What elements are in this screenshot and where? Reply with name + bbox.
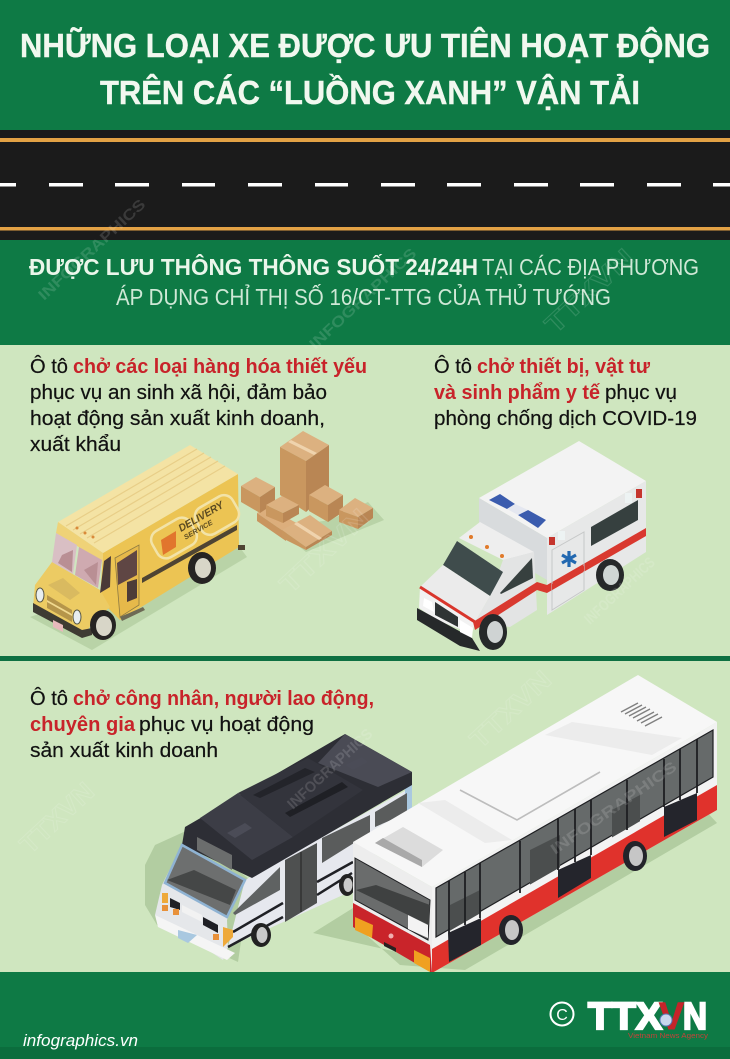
text: medical supplies: Ô tô <box>434 355 472 378</box>
icon: delivery van: DELIVERY <box>176 499 227 535</box>
text: essential goods: chở các loại hàng hóa thiết yếu <box>73 355 367 378</box>
text: essential goods <box>30 355 367 456</box>
icon: black and white bus <box>145 734 412 962</box>
subheading: ĐƯỢC LƯU THÔNG THÔNG SUỐT 24/24H <box>29 253 478 280</box>
text: medical supplies <box>434 355 697 430</box>
text: medical supplies: chở thiết bị, vật tư <box>477 355 650 378</box>
watermarks: TTXVN <box>274 502 375 599</box>
title: TRÊN CÁC “LUỒNG XANH” VẬN TẢI <box>100 74 640 111</box>
text: workers transport: Ô tô <box>30 687 68 710</box>
road <box>0 130 730 240</box>
text: medical supplies: phòng chống dịch COVID-19 <box>434 407 697 430</box>
panel: top vehicles background <box>0 345 730 656</box>
source url: infographics.vn <box>23 1031 138 1050</box>
subheading: ÁP DỤNG CHỈ THỊ SỐ 16/CT-TTG CỦA THỦ TƯỚNG <box>116 282 611 310</box>
icon: cardboard boxes <box>241 431 384 552</box>
logo: TTXVN: V <box>659 996 685 1038</box>
text: workers transport: sản xuất kinh doanh <box>30 739 218 762</box>
subheading <box>29 253 699 310</box>
watermarks: INFOGRAPHICS <box>35 196 149 304</box>
watermarks: TTXVN <box>464 664 557 754</box>
icon: delivery van: SERVICE <box>183 519 215 542</box>
watermarks <box>14 196 680 859</box>
text: workers transport <box>30 687 374 762</box>
watermarks: INFOGRAPHICS <box>284 725 376 813</box>
title <box>20 26 710 111</box>
text: workers transport: phục vụ hoạt động <box>139 713 314 736</box>
text: essential goods: phục vụ an sinh xã hội, đảm bảo <box>30 381 327 404</box>
watermarks: INFOGRAPHICS <box>548 758 680 858</box>
copyright mark <box>550 1002 574 1026</box>
logo: TTXVN: TTX <box>588 996 663 1038</box>
icon: red and white bus <box>313 675 717 973</box>
icon: delivery van <box>30 445 247 650</box>
panel: subheading band <box>0 240 730 345</box>
watermarks: INFOGRAPHICS <box>581 554 659 628</box>
text: essential goods: Ô tô <box>30 355 68 378</box>
icon: ambulance <box>417 441 646 651</box>
text: workers transport: chở công nhân, người lao động, <box>73 687 374 710</box>
panel: title band <box>0 0 730 130</box>
text: medical supplies: phục vụ <box>605 381 677 404</box>
text: essential goods: xuất khẩu <box>30 433 121 456</box>
subheading: TẠI CÁC ĐỊA PHƯƠNG <box>482 254 699 280</box>
text: medical supplies: và sinh phẩm y tế <box>434 381 601 404</box>
text: essential goods: hoạt động sản xuất kinh doanh, <box>30 407 325 430</box>
logo: TTXVN <box>588 996 708 1040</box>
watermarks: TTXVN <box>14 776 100 859</box>
divider band <box>0 656 730 661</box>
watermarks: TTXVN <box>539 242 640 339</box>
text: workers transport: chuyên gia <box>30 713 136 736</box>
panel: bus background <box>0 661 730 972</box>
logo: TTXVN: Vietnam News Agency <box>628 1031 708 1040</box>
copyright mark: C <box>556 1007 568 1024</box>
panel: footer band <box>0 972 730 1059</box>
logo: TTXVN: N <box>683 996 707 1038</box>
watermarks: INFOGRAPHICS <box>306 245 420 353</box>
